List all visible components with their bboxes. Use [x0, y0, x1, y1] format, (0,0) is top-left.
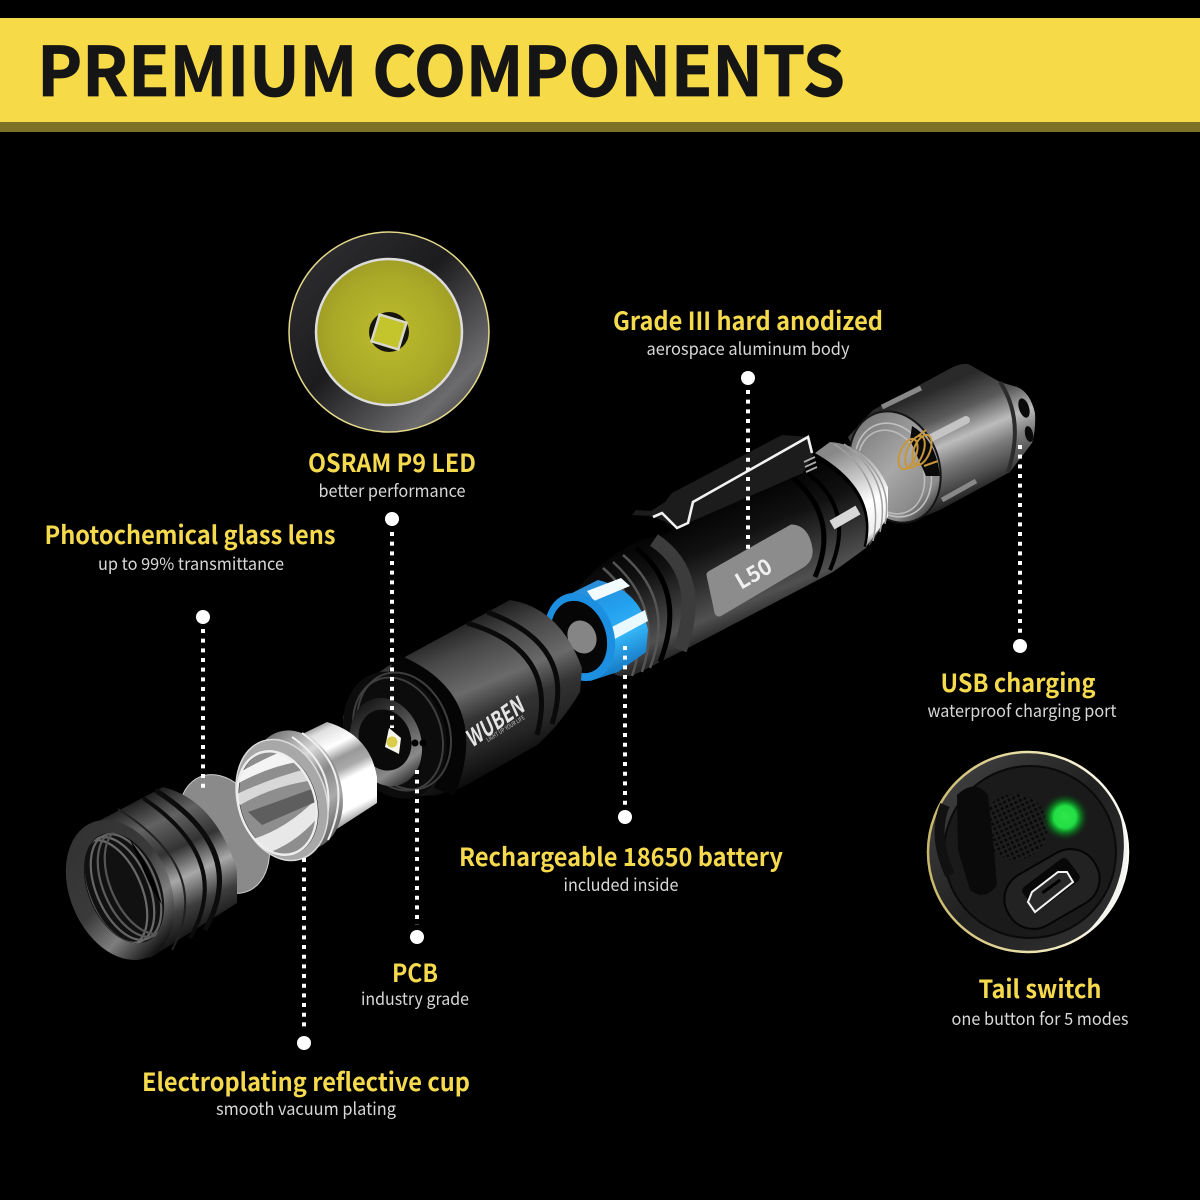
label: glass lens — [44, 516, 336, 575]
label: PCB — [361, 954, 469, 1010]
pocket clip — [632, 435, 817, 528]
label: USB charging: waterproof charging port — [928, 697, 1117, 722]
tail cap — [834, 364, 1035, 536]
L50 model plate — [711, 529, 808, 612]
label: reflective cup: smooth vacuum plating — [216, 1095, 396, 1120]
battery terminal — [562, 616, 602, 658]
LED close-up circle — [289, 232, 489, 432]
label: USB charging: USB charging — [940, 664, 1096, 700]
main body tube — [575, 442, 888, 677]
label: PCB: PCB — [392, 954, 438, 990]
label: aluminum body — [613, 302, 883, 360]
battery — [534, 578, 648, 690]
label: tail switch: one button for 5 modes — [952, 1005, 1129, 1030]
title: PREMIUM COMPONENTS — [37, 17, 845, 116]
label: tail switch: Tail switch — [978, 970, 1102, 1006]
label: reflective cup — [142, 1063, 470, 1120]
spring — [895, 430, 938, 472]
label: glass lens: Photochemical glass lens — [44, 516, 336, 552]
label: aluminum body: Grade III hard anodized — [613, 302, 883, 338]
mesh switch button — [982, 794, 1048, 860]
glass lens — [161, 761, 287, 907]
label: battery: Rechargeable 18650 battery — [459, 838, 784, 874]
silver threads — [815, 442, 888, 547]
label: PCB: industry grade — [361, 985, 469, 1010]
label: tail switch — [952, 970, 1129, 1030]
label: LED — [308, 444, 476, 502]
USB port plate — [994, 839, 1110, 939]
title banner — [0, 17, 1200, 132]
WUBEN logo: WUBEN — [457, 687, 532, 754]
rubber flap — [957, 786, 997, 895]
callout dots and leader lines — [196, 371, 1027, 1050]
label: aluminum body: aerospace aluminum body — [646, 335, 850, 360]
LED head module — [326, 600, 582, 813]
label: battery — [459, 838, 784, 896]
LED chip — [385, 728, 401, 754]
label: battery: included inside — [564, 871, 678, 896]
green indicator — [1041, 793, 1089, 841]
WUBEN logo: LIGHT UP YOUR LIFE — [484, 713, 527, 744]
tail switch close-up circle — [928, 752, 1128, 952]
exploded flashlight — [45, 364, 1035, 977]
L50 model plate: L50 — [728, 549, 777, 596]
label: reflective cup: Electroplating reflective cup — [142, 1063, 470, 1099]
label: LED: better performance — [318, 477, 466, 502]
label: LED: OSRAM P9 LED — [308, 444, 476, 480]
label: glass lens: up to 99% transmittance — [98, 550, 284, 575]
bezel — [66, 787, 237, 960]
label: USB charging — [928, 664, 1117, 722]
reflective cup — [235, 722, 377, 862]
USB port — [1020, 856, 1082, 912]
